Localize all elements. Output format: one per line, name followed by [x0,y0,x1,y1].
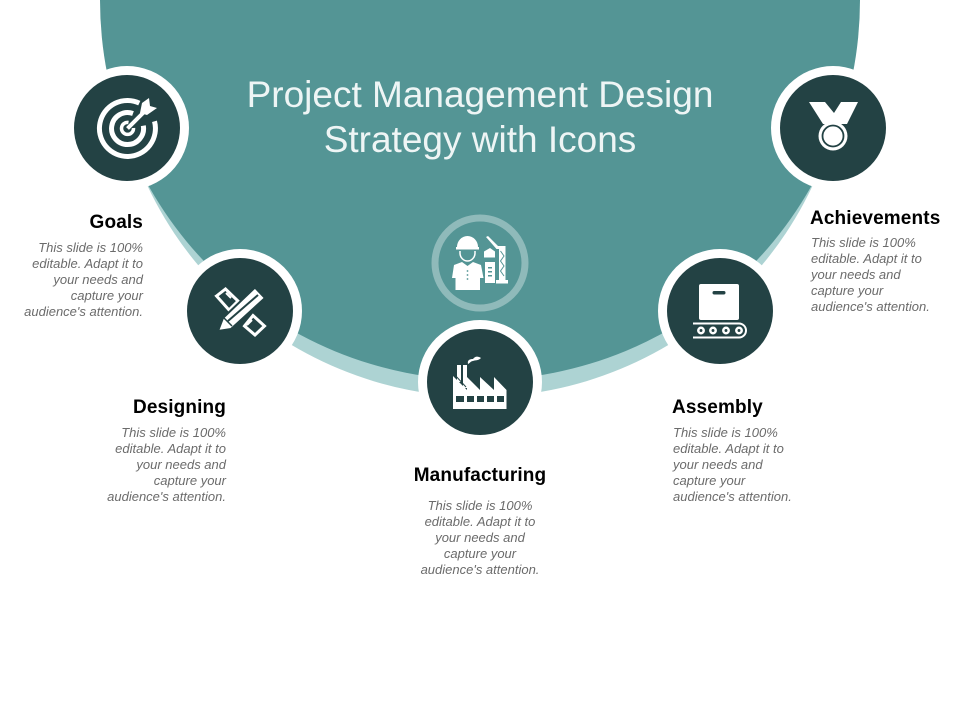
text: goals: This slide is 100% [38,240,143,255]
title [247,74,713,160]
text: assembly: capture your [673,473,745,488]
text: goals: audience's attention. [24,304,143,319]
worker [452,236,484,290]
text: achievements: audience's attention. [811,299,930,314]
icon: pencil and ruler [216,288,265,335]
text: assembly: your needs and [673,457,763,472]
text: designing: editable. Adapt it to [115,441,226,456]
crane [484,236,508,284]
text: manufacturing: your needs and [435,530,525,545]
title: Project Management Design [247,74,713,115]
teal semicircle [100,0,860,380]
badge: assembly [658,249,782,373]
heading: designing: Designing [133,397,226,418]
text: achievements: capture your [811,283,883,298]
text: assembly: audience's attention. [673,489,792,504]
text: manufacturing: editable. Adapt it to [425,514,535,529]
icon: medal [809,102,858,150]
text: manufacturing: This slide is 100% [428,498,532,513]
heading: manufacturing: Manufacturing [414,465,546,486]
text: manufacturing [420,498,539,577]
heading: achievements: Achievements [810,208,940,229]
icon: target [99,98,157,156]
text: assembly: editable. Adapt it to [673,441,784,456]
text: achievements: This slide is 100% [811,235,916,250]
text: manufacturing: capture your [444,546,516,561]
icon: conveyor box [693,284,746,338]
icon: factory [453,357,506,409]
badge: achievements [771,66,895,190]
heading: goals: Goals [90,212,143,233]
text: designing: audience's attention. [107,489,226,504]
text: assembly [672,425,792,504]
badge: designing [178,249,302,373]
badge: goals [65,66,189,190]
text: manufacturing: audience's attention. [421,562,539,577]
text: designing: This slide is 100% [121,425,226,440]
text: designing: your needs and [136,457,226,472]
text: achievements: your needs and [811,267,901,282]
text: goals: editable. Adapt it to [32,256,143,271]
text: designing: capture your [154,473,226,488]
central worker icon [435,218,525,308]
text: achievements [810,235,930,314]
light arc band [112,0,848,397]
badge: manufacturing [418,320,542,444]
text: goals [24,240,144,319]
text: goals: capture your [71,288,143,303]
text: designing [107,425,226,504]
title: Strategy with Icons [324,119,636,160]
text: goals: your needs and [53,272,143,287]
text: achievements: editable. Adapt it to [811,251,922,266]
heading: assembly: Assembly [672,397,763,418]
text: assembly: This slide is 100% [673,425,778,440]
